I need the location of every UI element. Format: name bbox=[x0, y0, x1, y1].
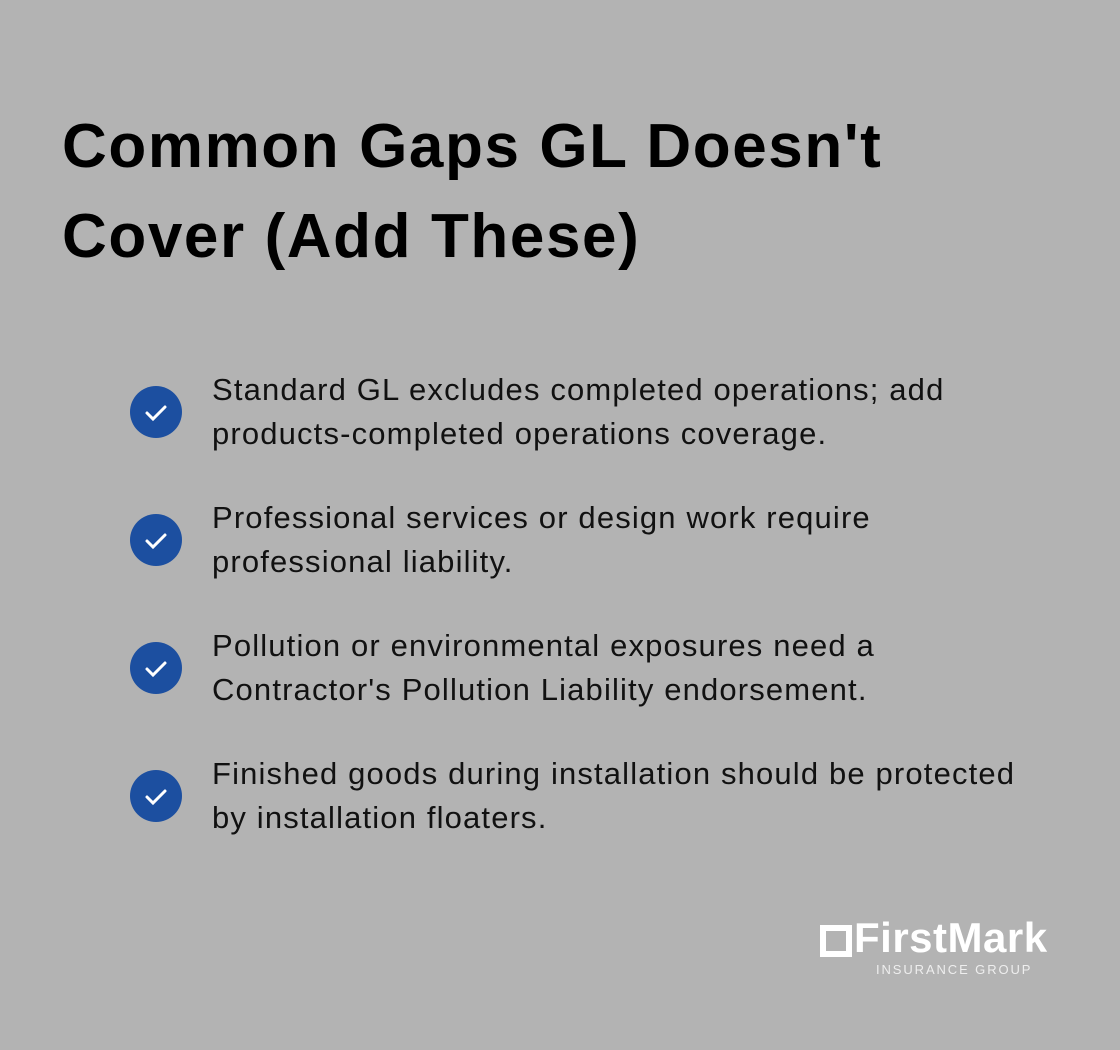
text 3: Contractor's Pollution Liability endorsement. bbox=[212, 672, 868, 707]
title: Cover (Add These) bbox=[62, 202, 640, 271]
logo: FirstMark bbox=[854, 914, 1048, 961]
text 2 bbox=[212, 500, 871, 579]
text 4 bbox=[212, 756, 1015, 835]
item 1 bbox=[130, 372, 944, 451]
icon: check bbox=[130, 770, 182, 822]
text 3: Pollution or environmental exposures need a bbox=[212, 628, 875, 663]
text 1: Standard GL excludes completed operations; add bbox=[212, 372, 944, 407]
logo bbox=[820, 914, 1048, 977]
icon: check bbox=[130, 514, 182, 566]
icon: check bbox=[130, 642, 182, 694]
text 1 bbox=[212, 372, 944, 451]
item 2 bbox=[130, 500, 871, 579]
title bbox=[62, 112, 882, 271]
text 4: by installation floaters. bbox=[212, 800, 547, 835]
title: Common Gaps GL Doesn't bbox=[62, 112, 882, 181]
item 3 bbox=[130, 628, 875, 707]
item 4 bbox=[130, 756, 1015, 835]
text 2: Professional services or design work require bbox=[212, 500, 871, 535]
text 4: Finished goods during installation should be protected bbox=[212, 756, 1015, 791]
text 3 bbox=[212, 628, 875, 707]
icon: check bbox=[130, 386, 182, 438]
text 2: professional liability. bbox=[212, 544, 514, 579]
text 1: products-completed operations coverage. bbox=[212, 416, 827, 451]
logo: INSURANCE GROUP bbox=[876, 962, 1032, 977]
